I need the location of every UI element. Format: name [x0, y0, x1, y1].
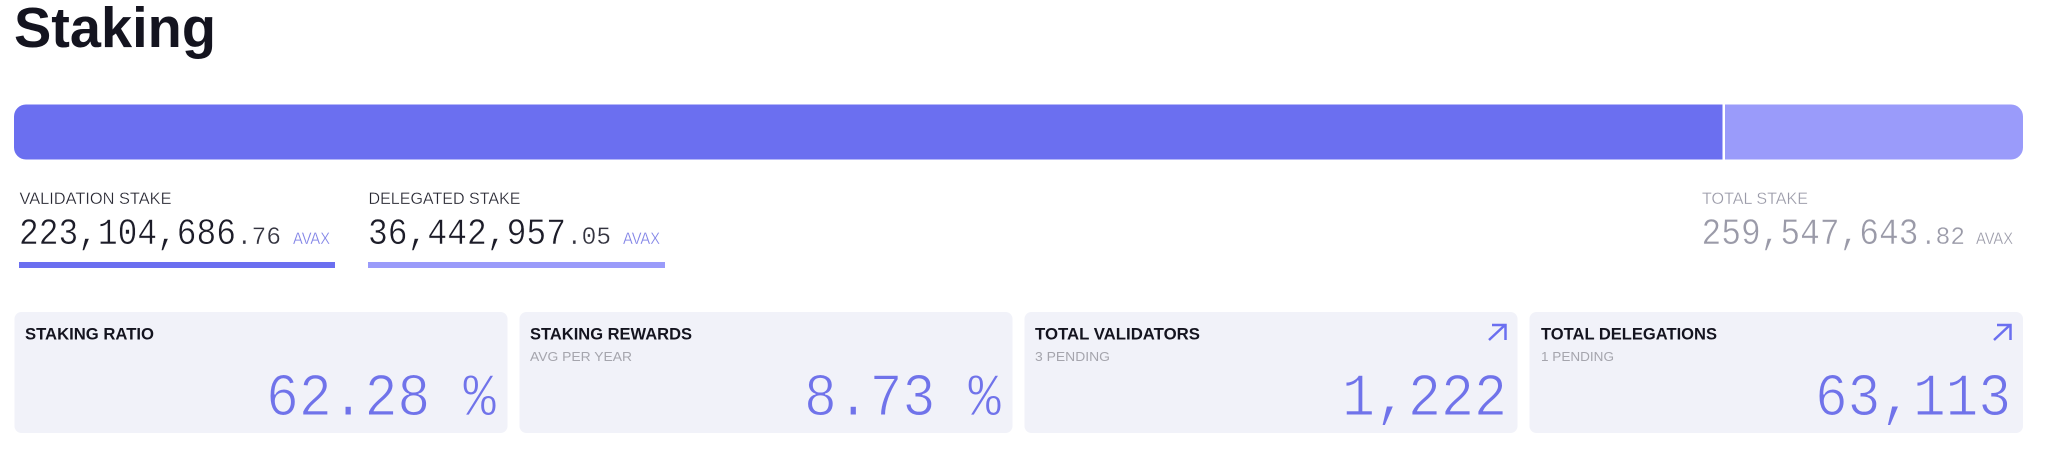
stacked stake bar	[14, 104, 2023, 160]
panel: total validators	[1024, 312, 1518, 434]
icon: arrow up right	[1489, 325, 1506, 340]
panel: staking rewards: STAKING REWARDS	[530, 326, 692, 344]
validation stake legend: AVAX	[293, 229, 330, 248]
panel: total delegations: TOTAL DELEGATIONS	[1541, 326, 1717, 344]
delegated stake legend: AVAX	[623, 229, 660, 248]
panel: staking ratio: STAKING RATIO	[25, 326, 154, 344]
delegated stake legend: DELEGATED STAKE	[368, 189, 520, 208]
panel: total delegations	[1530, 312, 2023, 434]
panel: total delegations: 1 PENDING	[1541, 349, 1614, 364]
delegated stake legend: 36,442,957	[368, 214, 566, 256]
panel: total validators: 1,222	[1342, 366, 1507, 434]
delegated stake legend: .05	[567, 223, 611, 252]
total stake legend	[1702, 189, 2013, 256]
panel: staking ratio: 62.28 %	[266, 366, 497, 434]
validation stake legend: .76	[237, 223, 281, 252]
total stake legend: TOTAL STAKE	[1702, 189, 1808, 208]
validation stake legend: VALIDATION STAKE	[20, 189, 172, 208]
panel: total validators: TOTAL VALIDATORS	[1035, 326, 1200, 344]
validation stake legend	[19, 189, 335, 268]
panel: staking rewards: 8.73 %	[804, 366, 1002, 434]
total stake legend: AVAX	[1976, 229, 2013, 248]
panel: total delegations: 63,113	[1815, 366, 2011, 434]
panel: staking rewards	[520, 312, 1012, 434]
panel: total validators: 3 PENDING	[1035, 349, 1110, 364]
total stake legend: 259,547,643	[1702, 214, 1918, 256]
panel: staking rewards: AVG PER YEAR	[530, 349, 632, 364]
delegated stake legend	[368, 189, 665, 268]
total stake legend: .82	[1921, 223, 1965, 252]
validation stake legend: 223,104,686	[19, 214, 236, 256]
icon: arrow up right	[1994, 325, 2010, 340]
panel: staking ratio	[14, 312, 508, 434]
